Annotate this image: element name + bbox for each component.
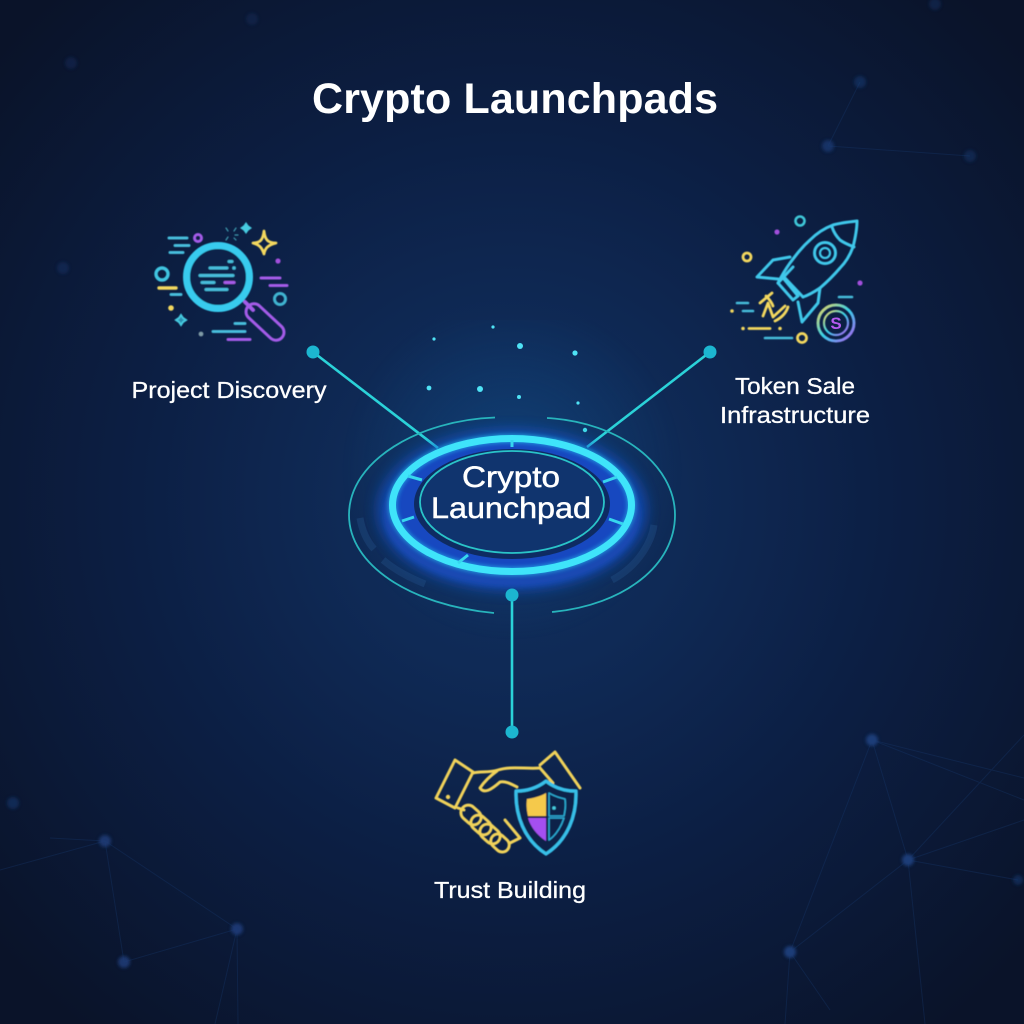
outer glow	[386, 438, 638, 582]
center label: Crypto	[462, 461, 560, 494]
center label: Launchpad	[431, 492, 591, 525]
connector: trust building	[506, 595, 518, 738]
bright ring glow	[392, 438, 632, 572]
center label	[431, 461, 591, 525]
bottom ring node	[506, 588, 518, 602]
label: token sale infrastructure: Token Sale	[735, 373, 855, 399]
center glow	[300, 320, 724, 660]
label: project discovery: Project Discovery	[132, 377, 327, 403]
connector: project discovery	[306, 346, 438, 448]
label: token sale infrastructure: Infrastructure	[720, 402, 870, 428]
icon: handshake with shield	[436, 752, 580, 855]
tick marks	[402, 440, 623, 563]
bright ring	[392, 438, 632, 572]
label: token sale infrastructure	[720, 373, 870, 428]
title: Crypto Launchpads	[312, 75, 718, 123]
icon: coin symbol: S	[830, 314, 842, 333]
connector: token sale infrastructure	[587, 346, 716, 447]
icon: magnifying glass	[156, 222, 287, 344]
particles	[427, 325, 580, 405]
inner band	[396, 441, 628, 569]
faint inner arc fragments	[360, 518, 654, 584]
central ring: crypto launchpad	[349, 418, 675, 613]
icon: rocket	[730, 216, 863, 342]
label: trust building: Trust Building	[434, 877, 586, 903]
inner dark disc	[414, 449, 610, 559]
blue disc base	[384, 443, 640, 587]
outer arcs	[349, 418, 675, 613]
